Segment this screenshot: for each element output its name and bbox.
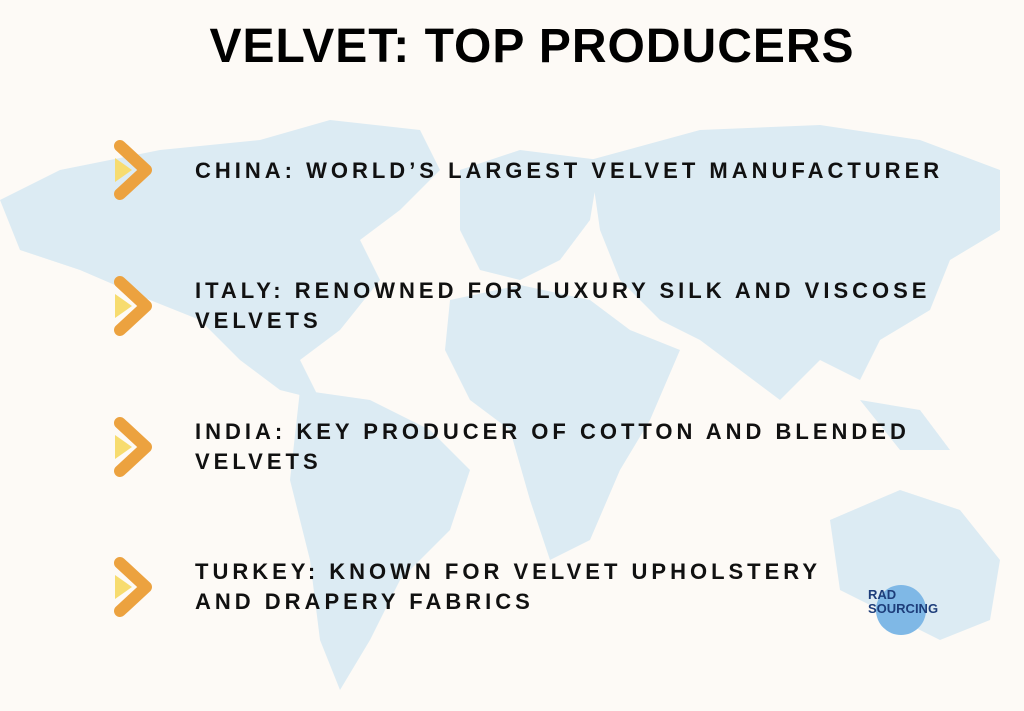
title: VELVET: TOP PRODUCERS — [209, 20, 855, 73]
text: india: VELVETS — [195, 449, 322, 474]
text: turkey: TURKEY: KNOWN FOR VELVET UPHOLSTERY — [195, 559, 821, 584]
icon: chevron turkey — [114, 557, 152, 617]
logo: SOURCING — [868, 601, 938, 616]
text: india: INDIA: KEY PRODUCER OF COTTON AND BLENDED — [195, 419, 910, 444]
icon: chevron india — [114, 417, 152, 477]
text: italy — [195, 278, 930, 333]
text: turkey — [195, 559, 821, 614]
text: italy: ITALY: RENOWNED FOR LUXURY SILK AND VISCOSE — [195, 278, 930, 303]
icon: chevron china — [114, 140, 152, 200]
text: india — [195, 419, 910, 474]
text: turkey: AND DRAPERY FABRICS — [195, 589, 534, 614]
text: italy: VELVETS — [195, 308, 322, 333]
logo — [868, 585, 938, 635]
icon: chevron italy — [114, 276, 152, 336]
text: china: CHINA: WORLD’S LARGEST VELVET MANUFACTURER — [195, 158, 943, 183]
logo: RAD — [868, 587, 896, 602]
